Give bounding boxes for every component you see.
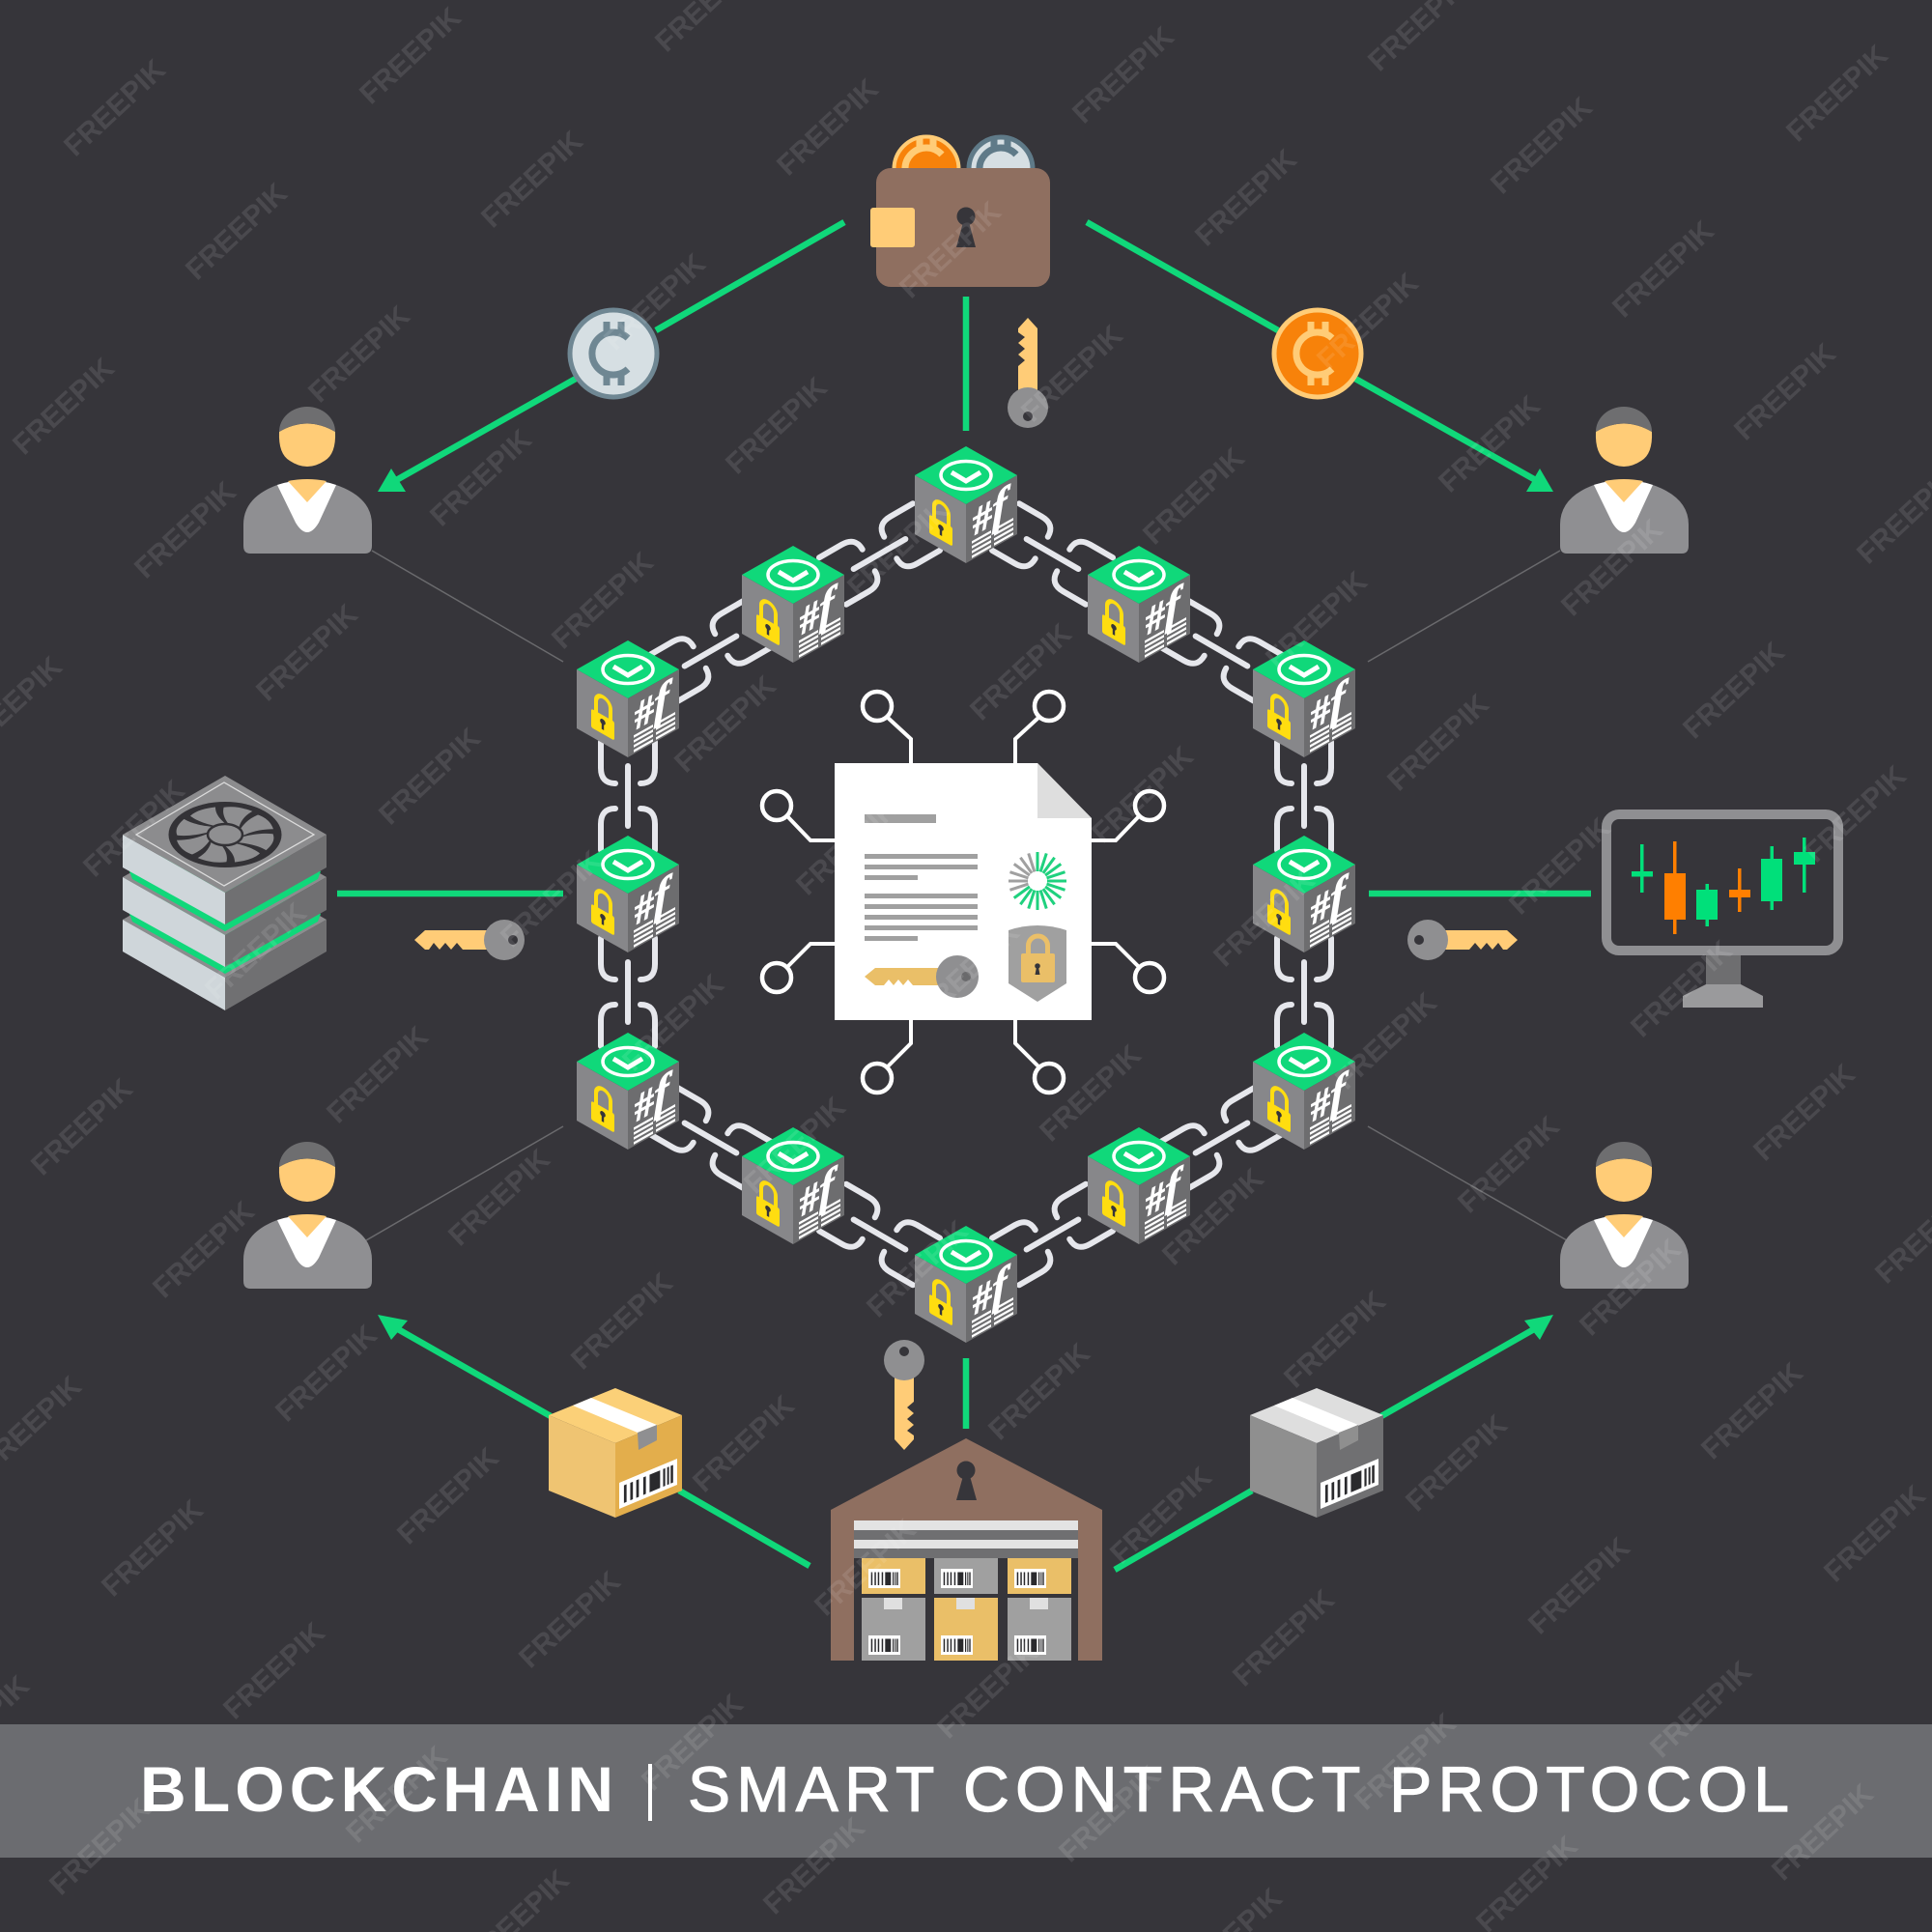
watermark text: FREEPIK bbox=[96, 1493, 210, 1603]
block: upper right 2: #f bbox=[1311, 669, 1350, 740]
thin connector lines to users bbox=[366, 551, 1567, 1240]
smart contract document bbox=[835, 763, 1092, 1020]
watermark text: FREEPIK bbox=[321, 1020, 435, 1129]
arrowhead: bottom left bbox=[378, 1315, 408, 1340]
block: upper right 1: #f bbox=[1146, 575, 1184, 645]
watermark text: FREEPIK bbox=[373, 722, 487, 831]
watermark text: FREEPIK bbox=[128, 475, 242, 584]
watermark text: FREEPIK bbox=[931, 1635, 1045, 1745]
watermark text: FREEPIK bbox=[1311, 267, 1425, 376]
watermark text: FREEPIK bbox=[1208, 864, 1321, 973]
watermark text: FREEPIK bbox=[1503, 811, 1617, 921]
orange coin bbox=[1274, 310, 1361, 397]
watermark text: FREEPIK bbox=[1555, 513, 1669, 622]
user: bottom right bbox=[1560, 1142, 1689, 1289]
watermark text: FREEPIK bbox=[1799, 759, 1913, 868]
watermark text: FREEPIK bbox=[1189, 143, 1303, 252]
watermark text: FREEPIK bbox=[1053, 1759, 1167, 1868]
watermark text: FREEPIK bbox=[1780, 39, 1894, 148]
watermark text: FREEPIK bbox=[199, 896, 313, 1006]
watermark text: FREEPIK bbox=[738, 1091, 852, 1200]
watermark text: FREEPIK bbox=[77, 774, 191, 883]
chain links bbox=[601, 503, 1331, 1285]
watermark text: FREEPIK bbox=[964, 617, 1078, 726]
block: middle left bbox=[577, 836, 679, 952]
block: bottom bbox=[915, 1226, 1017, 1343]
watermark text: FREEPIK bbox=[1452, 1110, 1566, 1219]
watermark text: FREEPIK bbox=[546, 546, 660, 655]
watermark text: FREEPIK bbox=[1677, 636, 1791, 745]
block: upper left 1 bbox=[742, 546, 844, 663]
watermark text: FREEPIK bbox=[180, 177, 294, 286]
watermark text: FREEPIK bbox=[1156, 1162, 1270, 1271]
watermark text: FREEPIK bbox=[340, 1740, 454, 1849]
document key bbox=[865, 955, 979, 998]
user: bottom left bbox=[243, 1142, 372, 1289]
key: left bbox=[414, 920, 525, 960]
arrowhead: top right bbox=[1526, 469, 1553, 492]
loading spinner bbox=[1009, 852, 1066, 910]
block: upper right 1 bbox=[1088, 546, 1190, 663]
watermark text: FREEPIK bbox=[894, 195, 1008, 304]
shield with padlock bbox=[1009, 925, 1066, 1002]
watermark text: FREEPIK bbox=[1574, 1233, 1688, 1342]
watermark text: FREEPIK bbox=[687, 1389, 801, 1498]
watermark text: FREEPIK bbox=[495, 844, 609, 953]
block: middle left: #f bbox=[635, 865, 673, 935]
watermark text: FREEPIK bbox=[58, 53, 172, 162]
title: SMART CONTRACT PROTOCOL bbox=[688, 1753, 1789, 1825]
watermark text: FREEPIK bbox=[861, 1214, 975, 1323]
watermark text: FREEPIK bbox=[270, 1319, 384, 1428]
watermark text: FREEPIK bbox=[757, 1811, 871, 1920]
block: lower right 1: #f bbox=[1146, 1156, 1184, 1227]
block: middle right bbox=[1253, 836, 1355, 952]
monitor with candlestick chart bbox=[1606, 814, 1838, 1008]
watermark text: FREEPIK bbox=[565, 1266, 679, 1376]
watermark text: FREEPIK bbox=[720, 371, 834, 480]
watermark text: FREEPIK bbox=[636, 1688, 750, 1797]
block: lower right 2 bbox=[1253, 1033, 1355, 1150]
watermark text: FREEPIK bbox=[1522, 1531, 1636, 1640]
watermark text: FREEPIK bbox=[1015, 319, 1129, 428]
block: middle right: #f bbox=[1311, 865, 1350, 935]
block: lower left 1: #f bbox=[800, 1156, 838, 1227]
title bbox=[140, 1753, 1789, 1825]
watermark text: FREEPIK bbox=[513, 1565, 627, 1674]
watermark text: FREEPIK bbox=[424, 423, 538, 532]
watermark text: FREEPIK bbox=[1329, 986, 1443, 1095]
key: top bbox=[1008, 318, 1048, 428]
watermark text: FREEPIK bbox=[1606, 214, 1720, 324]
watermark text: FREEPIK bbox=[1485, 91, 1599, 200]
watermark text: FREEPIK bbox=[7, 352, 121, 461]
candlesticks bbox=[1632, 838, 1815, 934]
watermark text: FREEPIK bbox=[354, 1, 468, 110]
watermark text: FREEPIK bbox=[790, 792, 904, 901]
watermark text: FREEPIK bbox=[1644, 1655, 1758, 1764]
watermark text: FREEPIK bbox=[1137, 441, 1251, 551]
key: right bbox=[1407, 920, 1518, 960]
watermark text: FREEPIK bbox=[1086, 740, 1200, 849]
watermark text: FREEPIK bbox=[1278, 1285, 1392, 1394]
arrowhead: top left bbox=[378, 469, 406, 492]
watermark text: FREEPIK bbox=[598, 247, 712, 356]
watermark text: FREEPIK bbox=[668, 669, 782, 779]
watermark text: FREEPIK bbox=[1381, 688, 1495, 797]
watermark text: FREEPIK bbox=[616, 968, 730, 1077]
watermark text: FREEPIK bbox=[1227, 1583, 1341, 1692]
watermark text: FREEPIK bbox=[809, 1513, 923, 1622]
block: bottom: #f bbox=[973, 1255, 1011, 1325]
green flow lines bbox=[337, 222, 1591, 1570]
block: upper left 2: #f bbox=[635, 669, 673, 740]
block: lower right 2: #f bbox=[1311, 1062, 1350, 1132]
server stack with fan bbox=[123, 776, 327, 1010]
watermark text: FREEPIK bbox=[1433, 389, 1547, 498]
watermark text: FREEPIK bbox=[841, 494, 955, 603]
watermark text: FREEPIK bbox=[1625, 934, 1739, 1043]
watermark text: FREEPIK bbox=[1728, 337, 1842, 446]
watermark text: FREEPIK bbox=[43, 1792, 157, 1901]
key: bottom bbox=[884, 1340, 924, 1450]
watermark text: FREEPIK bbox=[250, 598, 364, 707]
watermark text: FREEPIK bbox=[217, 1616, 331, 1725]
block: lower left 1 bbox=[742, 1127, 844, 1244]
watermark text: FREEPIK bbox=[1766, 1777, 1880, 1887]
block: top bbox=[915, 446, 1017, 563]
contract connectors bbox=[762, 692, 1164, 1093]
watermark text: FREEPIK bbox=[1747, 1058, 1861, 1167]
grey package bbox=[1250, 1388, 1383, 1518]
user: top left bbox=[243, 407, 372, 554]
watermark text: FREEPIK bbox=[475, 125, 589, 234]
watermark text: FREEPIK bbox=[1066, 20, 1180, 129]
watermark text: FREEPIK bbox=[391, 1441, 505, 1550]
gold package bbox=[549, 1388, 682, 1518]
watermark text: FREEPIK bbox=[302, 299, 416, 409]
arrowhead: bottom right bbox=[1524, 1315, 1553, 1340]
watermark text: FREEPIK bbox=[1349, 1707, 1463, 1816]
block: upper right 2 bbox=[1253, 640, 1355, 757]
watermark text: FREEPIK bbox=[1400, 1408, 1514, 1518]
watermark text: FREEPIK bbox=[1034, 1038, 1148, 1148]
watermark text: FREEPIK bbox=[442, 1143, 556, 1252]
user: top right bbox=[1560, 407, 1689, 554]
watermark text: FREEPIK bbox=[1260, 565, 1374, 674]
footer banner bbox=[0, 1724, 1932, 1858]
document text lines bbox=[865, 814, 978, 941]
watermark text: FREEPIK bbox=[1818, 1479, 1932, 1588]
watermark text: FREEPIK bbox=[982, 1337, 1096, 1446]
block: top: #f bbox=[973, 475, 1011, 546]
block: upper left 2 bbox=[577, 640, 679, 757]
block: lower left 2 bbox=[577, 1033, 679, 1150]
block: lower left 2: #f bbox=[635, 1062, 673, 1132]
watermark text: FREEPIK bbox=[1695, 1356, 1809, 1465]
watermark text: FREEPIK bbox=[147, 1195, 261, 1304]
watermark text: FREEPIK bbox=[25, 1072, 139, 1181]
warehouse bbox=[831, 1438, 1102, 1661]
silver coin bbox=[570, 310, 657, 397]
watermark text: FREEPIK bbox=[1104, 1461, 1218, 1570]
watermark text: FREEPIK bbox=[912, 916, 1026, 1025]
block: lower right 1 bbox=[1088, 1127, 1190, 1244]
watermark text: FREEPIK bbox=[771, 72, 885, 182]
wallet with coins bbox=[870, 137, 1050, 287]
title: BLOCKCHAIN bbox=[140, 1753, 613, 1825]
block: upper left 1: #f bbox=[800, 575, 838, 645]
